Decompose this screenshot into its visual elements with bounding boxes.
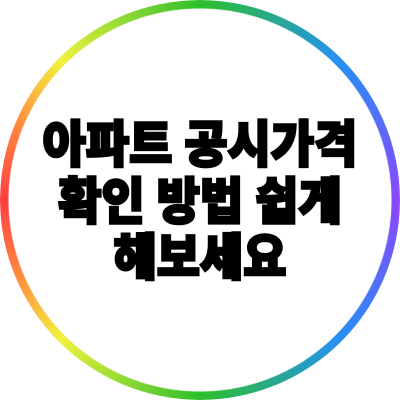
title line 3: 해보세요 xyxy=(114,229,286,286)
title line 2: 확인 방법 쉽게 xyxy=(58,173,342,230)
title line 1: 아파트 공시가격 xyxy=(43,116,357,173)
